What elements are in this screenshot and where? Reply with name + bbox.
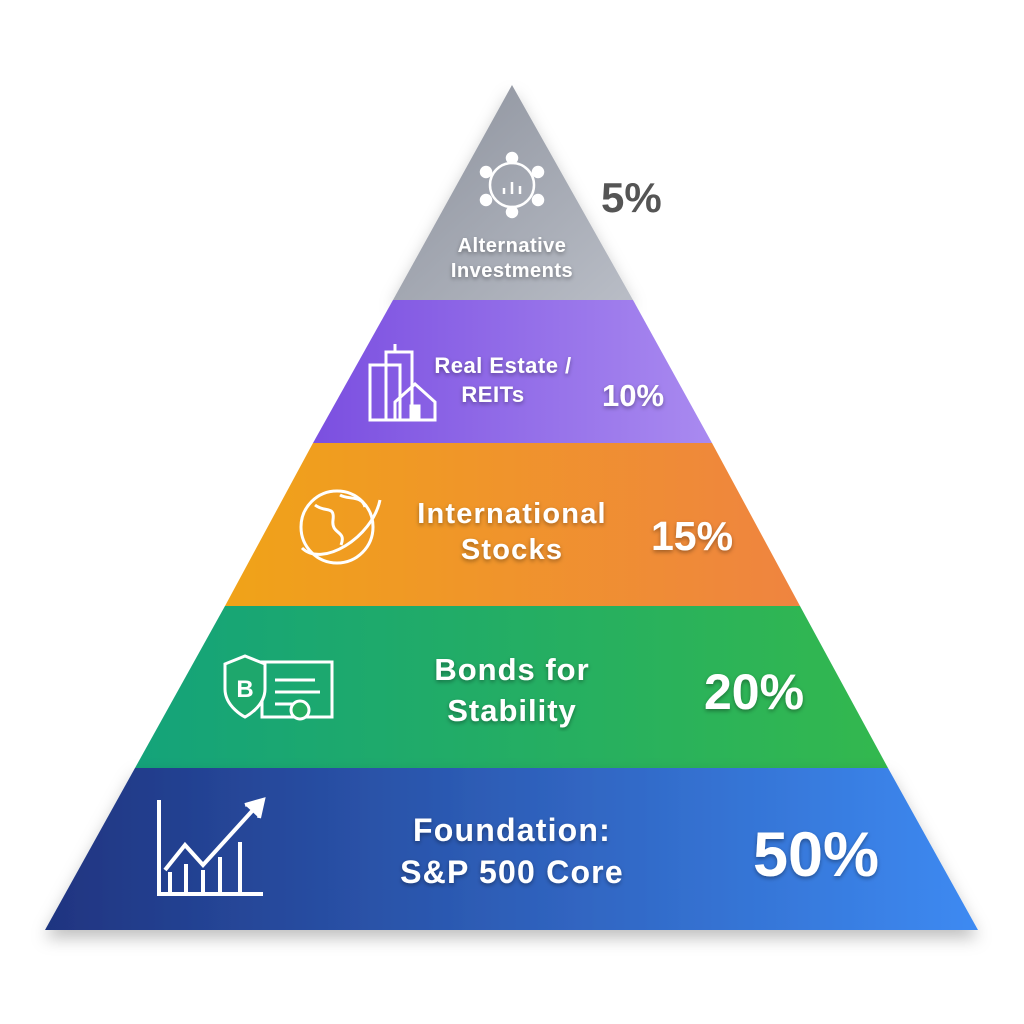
label: alternative investments: Alternative — [458, 235, 566, 257]
percent: 5%: 5% — [601, 174, 662, 221]
icon: buildings — [370, 344, 435, 420]
label: bonds: Bonds for — [434, 652, 590, 687]
icon: shield and certificate — [225, 656, 332, 719]
layer: foundation — [45, 768, 978, 930]
label: foundation: Foundation: — [413, 812, 611, 848]
icon: network — [481, 153, 543, 217]
percent: 20%: 20% — [704, 664, 804, 720]
icon: globe — [301, 491, 380, 563]
layer: alternative investments: Investments — [451, 260, 573, 282]
layer: international stocks: Stocks — [461, 534, 563, 566]
layer: bonds: Stability — [447, 693, 577, 728]
percent: 10%: 10% — [602, 378, 664, 413]
percent: 50%: 50% — [753, 820, 879, 890]
layer: foundation: S&P 500 Core — [400, 854, 624, 890]
icon: shield and certificate: B — [236, 676, 254, 703]
icon: growth chart — [159, 800, 263, 894]
layer: real estate — [313, 300, 712, 443]
percent: 15%: 15% — [651, 513, 733, 559]
layer: real estate: REITs — [461, 382, 525, 407]
label: real estate: Real Estate / — [434, 353, 572, 378]
layer: international stocks — [225, 443, 800, 606]
layer: alternative investments — [393, 85, 633, 300]
layer: bonds — [135, 606, 888, 768]
label: international stocks: International — [417, 498, 607, 530]
